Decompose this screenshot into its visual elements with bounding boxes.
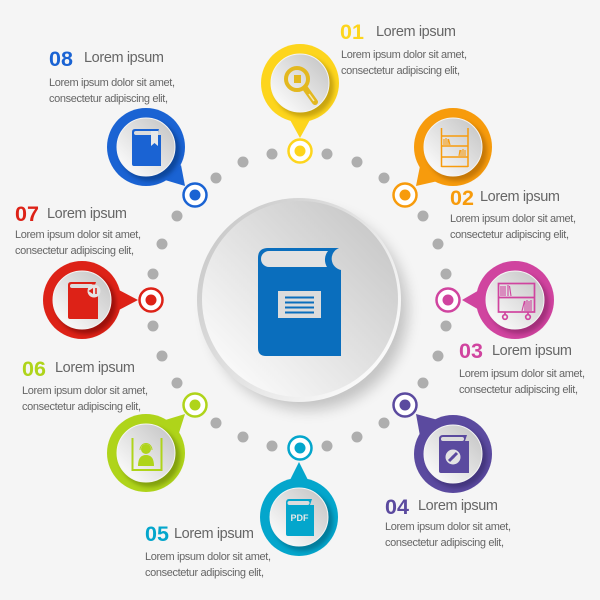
text 03: 03 <box>459 339 483 363</box>
text 07: consectetur adipiscing elit, <box>15 245 134 257</box>
text 06: 06 <box>22 357 46 381</box>
item 01 <box>261 20 467 162</box>
central disc with book <box>197 198 408 410</box>
icon: book with bookmark <box>132 129 161 166</box>
item 08 <box>49 47 206 206</box>
text 02: Lorem ipsum dolor sit amet, <box>450 213 576 225</box>
text 05: Lorem ipsum <box>174 526 254 542</box>
text 08: consectetur adipiscing elit, <box>49 93 168 105</box>
text 06 <box>22 357 148 413</box>
item 06 <box>22 357 206 492</box>
marker 04 <box>394 394 416 416</box>
icon: book with speaker <box>68 282 100 319</box>
icon: person in frame <box>132 438 162 470</box>
text 04: Lorem ipsum <box>418 498 498 514</box>
marker 05 <box>288 436 312 460</box>
marker 03 <box>436 288 460 312</box>
text 01: consectetur adipiscing elit, <box>341 65 460 77</box>
pin 05 <box>260 462 338 556</box>
item 02 <box>394 108 576 241</box>
text 01: 01 <box>340 20 364 44</box>
text 03: Lorem ipsum <box>492 343 572 359</box>
text 04 <box>385 495 511 549</box>
text 07: 07 <box>15 202 39 226</box>
pin 02 <box>414 108 492 186</box>
text 03: Lorem ipsum dolor sit amet, <box>459 368 585 380</box>
text 02: 02 <box>450 186 474 210</box>
text 06: Lorem ipsum <box>55 360 135 376</box>
icon: cart shelf <box>498 284 534 319</box>
item 05 <box>145 436 338 579</box>
text 05 <box>145 522 271 579</box>
pin 06 <box>107 414 185 492</box>
text 06: consectetur adipiscing elit, <box>22 401 141 413</box>
text 02: consectetur adipiscing elit, <box>450 229 569 241</box>
marker 07 <box>140 288 162 312</box>
text 01: Lorem ipsum <box>376 24 456 40</box>
text 04: 04 <box>385 495 409 519</box>
pin 01 <box>261 44 339 138</box>
text 05: 05 <box>145 522 169 546</box>
text 07: Lorem ipsum <box>47 206 127 222</box>
text 04: consectetur adipiscing elit, <box>385 537 504 549</box>
marker 06 <box>184 394 206 416</box>
text 04: Lorem ipsum dolor sit amet, <box>385 521 511 533</box>
item 04 <box>385 394 511 549</box>
item 07 <box>15 202 162 339</box>
text 08: Lorem ipsum <box>84 50 164 66</box>
pin 08 <box>107 108 185 186</box>
marker 01 <box>288 140 312 162</box>
icon: book with disc <box>439 435 469 473</box>
dotted ring <box>148 148 452 452</box>
text 06: Lorem ipsum dolor sit amet, <box>22 385 148 397</box>
marker 02 <box>394 184 416 206</box>
text 07 <box>15 202 141 257</box>
pin 04 <box>414 414 492 493</box>
text 05: consectetur adipiscing elit, <box>145 567 264 579</box>
marker 08 <box>184 184 206 206</box>
text 08: 08 <box>49 47 73 71</box>
pin 07 <box>43 261 138 339</box>
pin 03 <box>462 261 554 339</box>
text 08: Lorem ipsum dolor sit amet, <box>49 77 175 89</box>
icon: central book <box>258 248 341 356</box>
item 03 <box>436 261 585 396</box>
text 08 <box>49 47 175 105</box>
text 03: consectetur adipiscing elit, <box>459 384 578 396</box>
text 02: Lorem ipsum <box>480 189 560 205</box>
icon: PDF book: PDF <box>290 513 309 523</box>
icon: bookshelf <box>442 128 468 167</box>
text 01: Lorem ipsum dolor sit amet, <box>341 49 467 61</box>
icon: magnifier <box>286 68 315 102</box>
text 02 <box>450 186 576 241</box>
text 03 <box>459 339 585 396</box>
text 07: Lorem ipsum dolor sit amet, <box>15 229 141 241</box>
text 05: Lorem ipsum dolor sit amet, <box>145 551 271 563</box>
text 01 <box>340 20 467 77</box>
